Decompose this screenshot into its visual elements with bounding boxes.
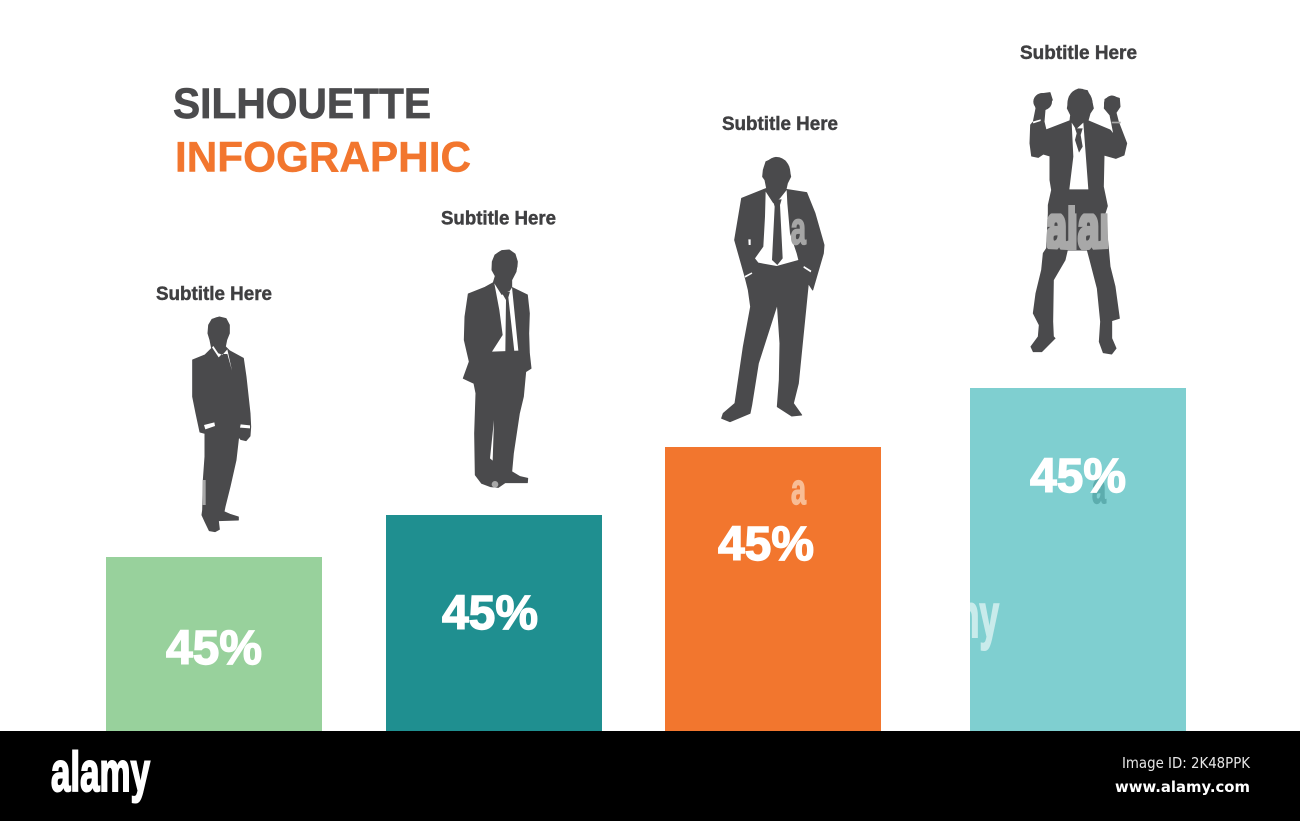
bar 2: teal: 45% [442, 587, 538, 640]
website url: www.alamy.com [1115, 778, 1250, 796]
bar 4: light teal: ny [958, 582, 999, 651]
bar 3: orange: 45% [718, 518, 814, 571]
icon: businessman silhouette 1 [193, 317, 251, 532]
watermark footer bar [0, 731, 1300, 821]
icon: businessman silhouette 4 [1030, 89, 1127, 354]
subtitle 1: Subtitle Here [156, 284, 272, 305]
bar 3: orange: a [791, 465, 806, 514]
bar 4: light teal: a [1092, 464, 1106, 513]
icon: businessman silhouette 2 [463, 250, 531, 488]
subtitle 2: Subtitle Here [441, 208, 556, 230]
image id: Image ID: 2K48PPK [1122, 754, 1251, 772]
bar 1: green: 45% [166, 622, 262, 675]
bar 4: light teal [958, 388, 1186, 731]
subtitle 4: Subtitle Here [1020, 43, 1137, 64]
title: SILHOUETTE [173, 80, 431, 128]
subtitle 3: Subtitle Here [722, 114, 838, 135]
title: INFOGRAPHIC [175, 134, 471, 182]
alamy logo: alamy [51, 740, 150, 803]
icon: businessman silhouette 4: alal [1045, 192, 1110, 262]
bar 3: orange [665, 447, 881, 731]
bar 2: teal [386, 515, 602, 731]
icon: businessman silhouette 3 [722, 157, 824, 422]
title [173, 80, 471, 182]
bar 4: light teal: 45% [1030, 450, 1126, 503]
icon: businessman silhouette 3: a [791, 203, 807, 254]
bar 1: green [106, 557, 322, 731]
